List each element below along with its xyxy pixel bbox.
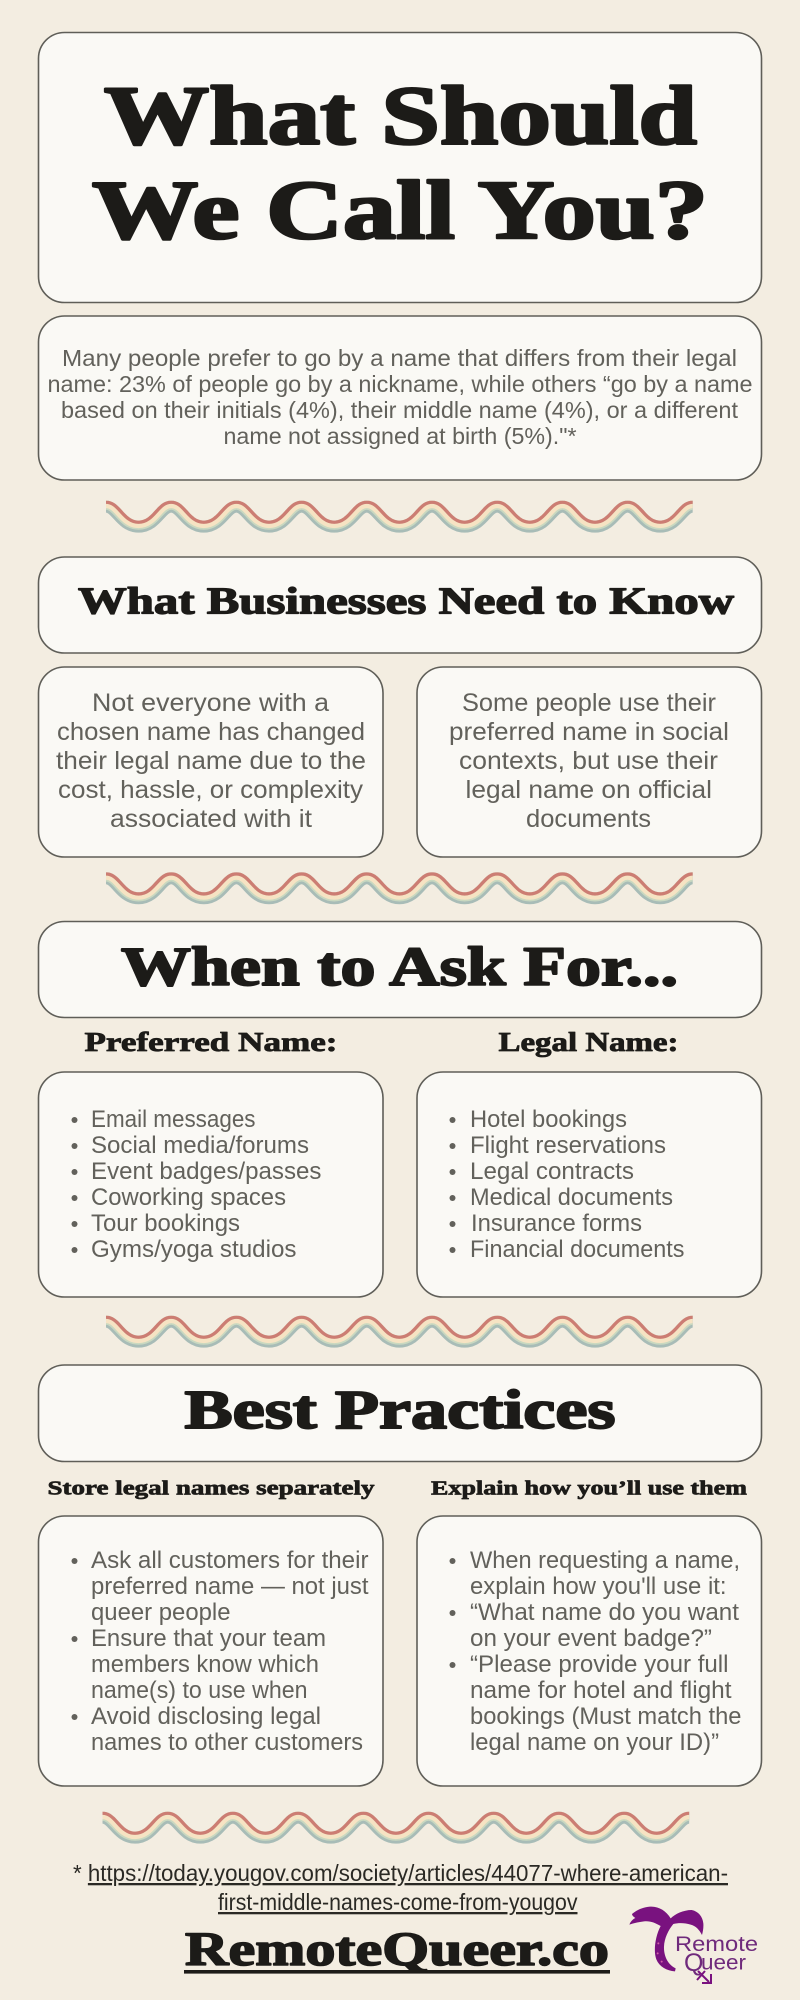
website name: RemoteQueer.co [185, 1923, 609, 1976]
logo: Remote Queer palm tree [629, 1907, 758, 1983]
panel: preferred name list [38, 1072, 383, 1297]
intro text: name: 23% of people go by a nickname, while others “go by a name [48, 371, 752, 397]
subheading: preferred name: Preferred Name: [84, 1027, 338, 1057]
wave divider 4 [102, 1812, 689, 1832]
list: Tour bookings [91, 1210, 240, 1237]
subheading: explain how you'll use them: Explain how you’ll use them [431, 1478, 747, 1500]
list: “What name do you want [470, 1599, 739, 1626]
list: Event badges/passes [91, 1158, 322, 1185]
panel: chosen name card [38, 667, 383, 857]
intro text [48, 345, 752, 449]
intro text: Many people prefer to go by a name that differs from their legal [62, 345, 737, 371]
panel: legal name list [417, 1072, 762, 1297]
list [450, 1547, 742, 1756]
icon: gender symbol [697, 1971, 711, 1983]
intro text: based on their initials (4%), their middle name (4%), or a different [61, 397, 739, 423]
list: members know which [91, 1651, 319, 1678]
title [92, 70, 708, 257]
source footnote: * https://today.yougov.com/society/articles/44077-where-american- [73, 1860, 728, 1886]
list: Gyms/yoga studios [91, 1236, 296, 1263]
logo wordmark [675, 1933, 758, 1977]
source footnote [73, 1860, 728, 1915]
list: preferred name — not just [91, 1573, 369, 1600]
wave divider 1 [106, 501, 693, 521]
panel: store legal names list [38, 1516, 383, 1786]
list: Legal contracts [470, 1158, 634, 1185]
icon: palm tree [629, 1907, 703, 1971]
panel: best practices heading [38, 1365, 762, 1462]
subheading: legal name: Legal Name: [498, 1027, 678, 1057]
heading: What Businesses Need to Know [78, 580, 734, 622]
intro text: name not assigned at birth (5%)."* [224, 423, 577, 449]
panel: intro statistics [38, 316, 762, 480]
logo wordmark: Remote [675, 1933, 758, 1956]
list [72, 1547, 369, 1756]
list: “Please provide your full [470, 1651, 728, 1678]
list: name for hotel and flight [470, 1677, 732, 1704]
panel: explain how you'll use them list [417, 1516, 762, 1786]
card text: associated with it [110, 805, 312, 833]
logo wordmark: Q [684, 1949, 703, 1977]
card text: cost, hassle, or complexity [58, 776, 364, 804]
card text [56, 689, 366, 833]
list: Ensure that your team [91, 1625, 326, 1652]
list: explain how you'll use it: [470, 1573, 726, 1600]
card text: legal name on official [466, 776, 712, 804]
card text: contexts, but use their [459, 747, 718, 775]
list: When requesting a name, [470, 1547, 740, 1574]
card text: their legal name due to the [56, 747, 366, 775]
panel: when to ask for heading [38, 922, 762, 1018]
list: Flight reservations [470, 1132, 666, 1159]
list: Medical documents [470, 1184, 673, 1211]
list [72, 1106, 322, 1263]
list: Insurance forms [471, 1210, 642, 1237]
title: What Should [104, 70, 697, 162]
card text: Not everyone with a [92, 689, 329, 717]
heading: Best Practices [184, 1379, 616, 1440]
list: Social media/forums [91, 1132, 309, 1159]
logo wordmark: ueer [701, 1952, 746, 1974]
list: Hotel bookings [470, 1106, 627, 1133]
list: names to other customers [91, 1729, 363, 1756]
list: Ask all customers for their [91, 1547, 368, 1574]
card text [449, 689, 729, 833]
source footnote: first-middle-names-come-from-yougov [218, 1889, 578, 1915]
subheading: store legal names separately: Store legal names separately [48, 1478, 375, 1500]
list: Financial documents [470, 1236, 684, 1263]
heading: When to Ask For... [121, 936, 678, 997]
list: bookings (Must match the [470, 1703, 742, 1730]
list [450, 1106, 684, 1263]
list: Avoid disclosing legal [91, 1703, 321, 1730]
list: Coworking spaces [91, 1184, 286, 1211]
list: Email messages [91, 1106, 256, 1133]
panel: preferred name in social contexts card [417, 667, 762, 857]
list: name(s) to use when [91, 1677, 308, 1704]
title: We Call You? [92, 164, 708, 257]
card text: Some people use their [462, 689, 716, 717]
list: on your event badge?” [470, 1625, 712, 1652]
panel: what businesses need to know heading [38, 557, 762, 653]
card text: chosen name has changed [57, 718, 365, 746]
list: queer people [91, 1599, 230, 1626]
card text: documents [526, 805, 651, 833]
list: legal name on your ID)” [470, 1729, 719, 1756]
wave divider 2 [106, 872, 693, 892]
card text: preferred name in social [449, 718, 729, 746]
panel: title [38, 32, 762, 302]
wave divider 3 [106, 1316, 693, 1336]
